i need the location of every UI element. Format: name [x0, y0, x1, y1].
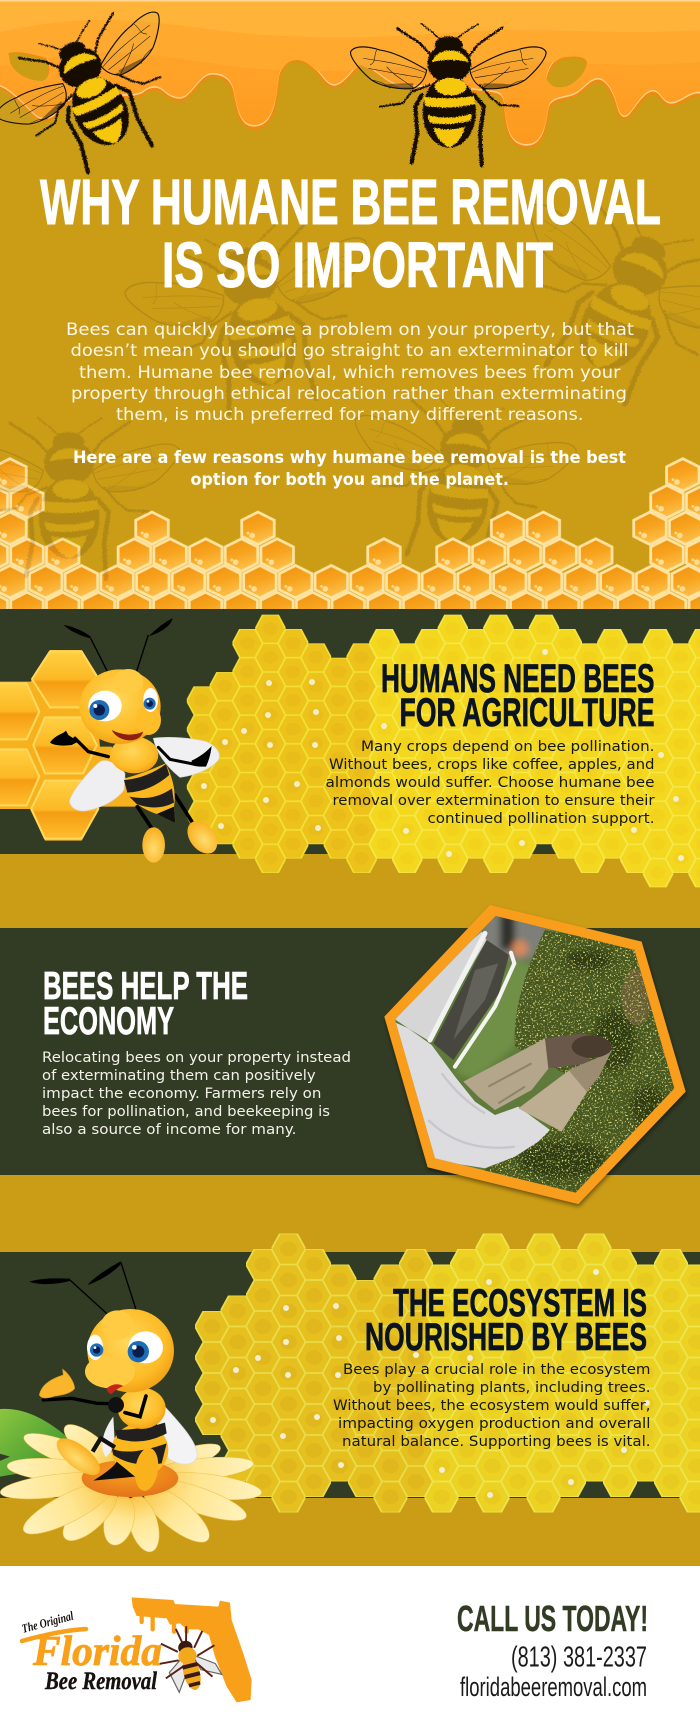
intro text: them. Humane bee removal, which removes bees from your	[79, 363, 621, 383]
veil	[433, 940, 509, 1060]
blurred backdrop	[455, 910, 548, 1080]
intro text: doesn’t mean you should go straight to an exterminator to kill	[70, 341, 628, 361]
cluster of bees	[572, 1035, 612, 1058]
heading: ecosystem	[365, 1282, 647, 1359]
hexagon frame	[384, 905, 686, 1204]
text: economy: Relocating bees on your property instead	[42, 1050, 351, 1066]
honeycomb border	[0, 457, 700, 626]
honeycomb field: ecosystem	[195, 1234, 700, 1512]
abdomen	[125, 763, 175, 823]
wings	[102, 1417, 115, 1457]
text: agriculture: Without bees, crops like coffee, apples, and	[329, 757, 654, 773]
eyes	[88, 691, 122, 721]
text: economy: bees for pollination, and beekeeping is	[42, 1104, 330, 1120]
wing left	[69, 761, 125, 811]
intro text: property through ethical relocation rather than exterminating	[71, 384, 627, 404]
swash	[22, 1629, 86, 1641]
watermark bee over comb	[0, 418, 179, 579]
text: economy: impact the economy. Farmers rely on	[42, 1086, 321, 1102]
text: agriculture	[326, 739, 655, 827]
thorax	[118, 1388, 166, 1429]
wordmark Florida: Florida	[32, 1629, 162, 1675]
text: ecosystem: natural balance. Supporting bees is vital.	[342, 1434, 650, 1450]
intro bold text: option for both you and the planet.	[190, 470, 509, 489]
watermark bees	[118, 174, 700, 578]
tongue	[107, 1384, 123, 1394]
thorax	[110, 737, 158, 773]
eyes	[128, 1331, 163, 1363]
title	[40, 166, 661, 301]
upper gauntlet and glove	[463, 1038, 550, 1110]
icon: bee top left	[0, 0, 209, 200]
honey lump	[39, 1369, 75, 1398]
comb backing	[0, 650, 138, 841]
text: agriculture: almonds would suffer. Choose humane bee	[326, 775, 655, 791]
wing right	[153, 737, 219, 777]
logo: Florida Bee Removal	[20, 1597, 252, 1702]
honeycomb cells behind mascot	[0, 651, 98, 839]
flower disc	[82, 1460, 178, 1497]
hood	[395, 932, 487, 1042]
arms	[75, 738, 108, 757]
text: ecosystem: by pollinating plants, including trees.	[373, 1380, 650, 1396]
suit body	[393, 1022, 550, 1168]
florida map	[132, 1597, 252, 1702]
antennae	[29, 1262, 137, 1315]
text: ecosystem: impacting oxygen production and overall	[338, 1416, 650, 1432]
text: ecosystem: Bees play a crucial role in the ecosystem	[343, 1362, 650, 1378]
intro text: Bees can quickly become a problem on your property, but that	[66, 320, 634, 340]
intro bold text: Here are a few reasons why humane bee removal is the best	[73, 448, 626, 467]
wordmark Bee Removal: Bee Removal	[44, 1668, 157, 1695]
text: agriculture: Many crops depend on bee pollination.	[361, 739, 654, 755]
illustration: waving bee mascot with comb	[0, 618, 223, 863]
heading: bees help the economy: ECONOMY	[43, 1000, 174, 1043]
lower gauntlet and glove	[518, 1068, 588, 1132]
mouth	[112, 730, 143, 740]
legs	[93, 1438, 115, 1452]
arms	[43, 1398, 120, 1404]
text: ecosystem: Without bees, the ecosystem would suffer,	[333, 1398, 650, 1414]
call to action	[457, 1598, 648, 1702]
tagline: The Original	[20, 1609, 75, 1636]
intro text	[66, 320, 634, 425]
back petals	[0, 1418, 263, 1555]
photo: beekeeper in hexagon frame	[375, 900, 695, 1210]
legs	[137, 795, 194, 832]
illustration: bee mascot on flower	[0, 1262, 263, 1555]
head	[79, 669, 161, 744]
heading: humans need bees	[381, 657, 654, 735]
bush foliage	[482, 930, 678, 1197]
panel: agriculture band	[0, 609, 700, 854]
heading: bees help the economy: BEES HELP THE	[43, 965, 248, 1008]
panel: economy band	[0, 928, 700, 1175]
intro text: them, is much preferred for many different reasons.	[116, 405, 584, 425]
text: economy: of exterminating them can positively	[42, 1068, 316, 1084]
abdomen	[112, 1423, 168, 1477]
head	[87, 1309, 174, 1392]
logo bee	[153, 1621, 224, 1697]
honeycomb field: agriculture	[187, 615, 700, 887]
text: ecosystem	[333, 1362, 650, 1450]
text: economy	[42, 1050, 351, 1138]
icon: bee top centre	[351, 24, 546, 165]
heading: bees help the economy	[43, 965, 248, 1043]
antennae	[64, 618, 173, 673]
footer panel	[0, 1566, 700, 1727]
text: economy: also a source of income for many.	[42, 1122, 296, 1138]
leaf	[0, 1409, 70, 1477]
intro bold text	[73, 448, 626, 489]
text: agriculture: removal over extermination to ensure their	[332, 793, 655, 809]
honey drip header	[0, 0, 700, 147]
text: agriculture: continued pollination support.	[428, 811, 654, 827]
panel: ecosystem band	[0, 1252, 700, 1498]
